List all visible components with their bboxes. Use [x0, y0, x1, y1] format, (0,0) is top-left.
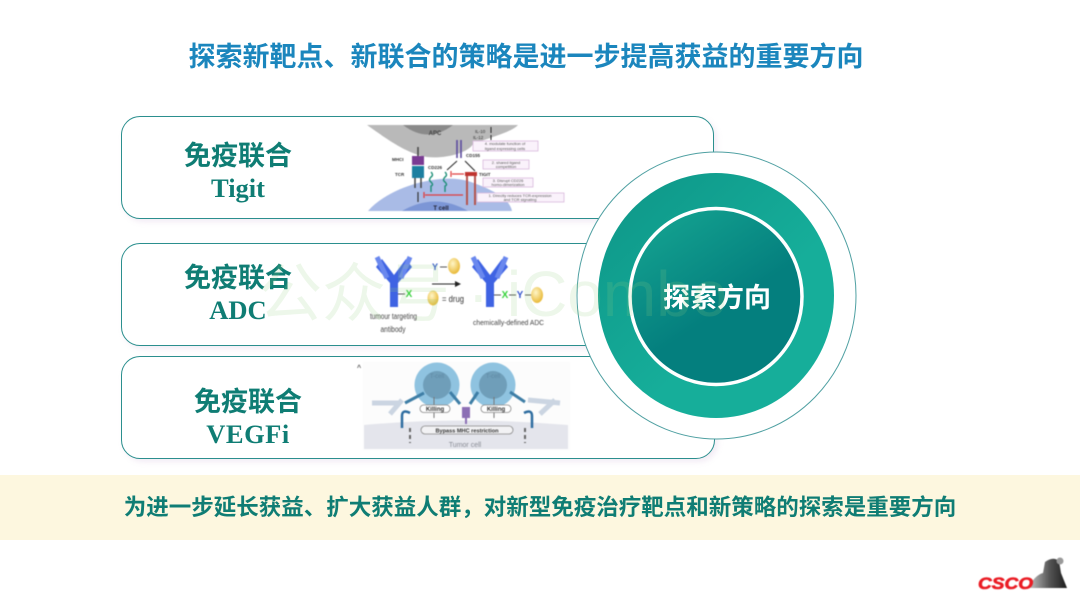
diagram: TIGIT pathway: TIGIT	[479, 172, 491, 177]
label: ADC: ADC	[209, 295, 267, 325]
label: VEGFi: 免疫联合	[194, 387, 302, 417]
diagram: bispecific T-cell killing: Killing	[426, 407, 444, 413]
label: Tigit: 免疫联合	[184, 141, 292, 171]
diagram: TIGIT pathway: ligand expressing cells	[485, 146, 525, 151]
footer banner: 为进一步延长获益、扩大获益人群，对新型免疫治疗靶点和新策略的探索是重要方向	[124, 495, 956, 520]
diagram: TIGIT pathway: T cell	[433, 206, 449, 212]
diagram: TIGIT pathway	[367, 124, 565, 212]
diagram: ADC structure: tumour targeting	[370, 312, 417, 321]
central circle: exploration direction	[576, 152, 856, 440]
panel: Tigit combination	[121, 116, 714, 219]
diagram: ADC structure: Y	[517, 290, 524, 301]
diagram: TIGIT pathway: IL-12	[473, 135, 484, 140]
central circle: exploration direction: 探索方向	[663, 282, 771, 313]
diagram: TIGIT pathway: TCR	[395, 172, 405, 177]
diagram: ADC structure	[370, 256, 545, 334]
footer banner	[0, 475, 1080, 540]
label: Tigit	[184, 141, 292, 203]
diagram: TIGIT pathway: 2. shared ligand	[492, 160, 520, 165]
diagram: TIGIT pathway: and TCR signaling	[504, 197, 536, 202]
diagram: ADC structure: chemically-defined ADC	[473, 318, 545, 327]
diagram: ADC structure: = drug	[442, 294, 464, 305]
diagram: ADC structure: X	[406, 289, 413, 300]
diagram: ADC structure: Y	[432, 262, 438, 272]
diagram: TIGIT pathway: CD226	[428, 165, 443, 170]
diagram: bispecific T-cell killing: Tumor cell	[449, 442, 482, 449]
label: VEGFi: VEGFi	[206, 419, 290, 449]
diagram: ADC structure: X	[502, 290, 509, 301]
diagram: TIGIT pathway: APC	[429, 131, 442, 137]
watermark: 公众号 · iCombo	[258, 258, 727, 330]
label: ADC: 免疫联合	[184, 263, 292, 293]
diagram: TIGIT pathway: 3. Disrupt CD226	[493, 178, 524, 183]
label: ADC	[184, 263, 292, 325]
diagram: TIGIT pathway: IL-10	[475, 129, 486, 134]
diagram: TIGIT pathway: MHCI	[392, 157, 404, 162]
diagram: ADC structure: antibody	[380, 325, 406, 334]
label: Tigit: Tigit	[211, 173, 265, 203]
diagram: TIGIT pathway: 1. Directly reduces TCR-expression	[488, 193, 552, 198]
diagram: TIGIT pathway: CD155	[466, 153, 481, 158]
logo: CSCO	[978, 557, 1068, 593]
logo: CSCO: CSCO	[978, 575, 1033, 593]
diagram: TIGIT pathway: competition	[496, 164, 516, 169]
diagram: bispecific T-cell killing: Bypass MHC restriction	[435, 428, 499, 434]
diagram: bispecific T-cell killing: Killing	[487, 407, 505, 413]
diagram: bispecific T-cell killing: T-cell	[486, 374, 500, 380]
label: VEGFi	[194, 387, 302, 449]
diagram: TIGIT pathway: 4. modulate function of	[485, 141, 526, 146]
title: 探索新靶点、新联合的策略是进一步提高获益的重要方向	[188, 42, 864, 72]
panel: VEGFi combination	[121, 356, 715, 459]
diagram: bispecific T-cell killing	[356, 362, 568, 450]
panel: ADC combination	[121, 243, 714, 346]
diagram: bispecific T-cell killing: T-cell	[430, 374, 444, 380]
diagram: TIGIT pathway: homo-dimerization	[492, 182, 524, 187]
diagram: bispecific T-cell killing: ^	[357, 364, 361, 372]
